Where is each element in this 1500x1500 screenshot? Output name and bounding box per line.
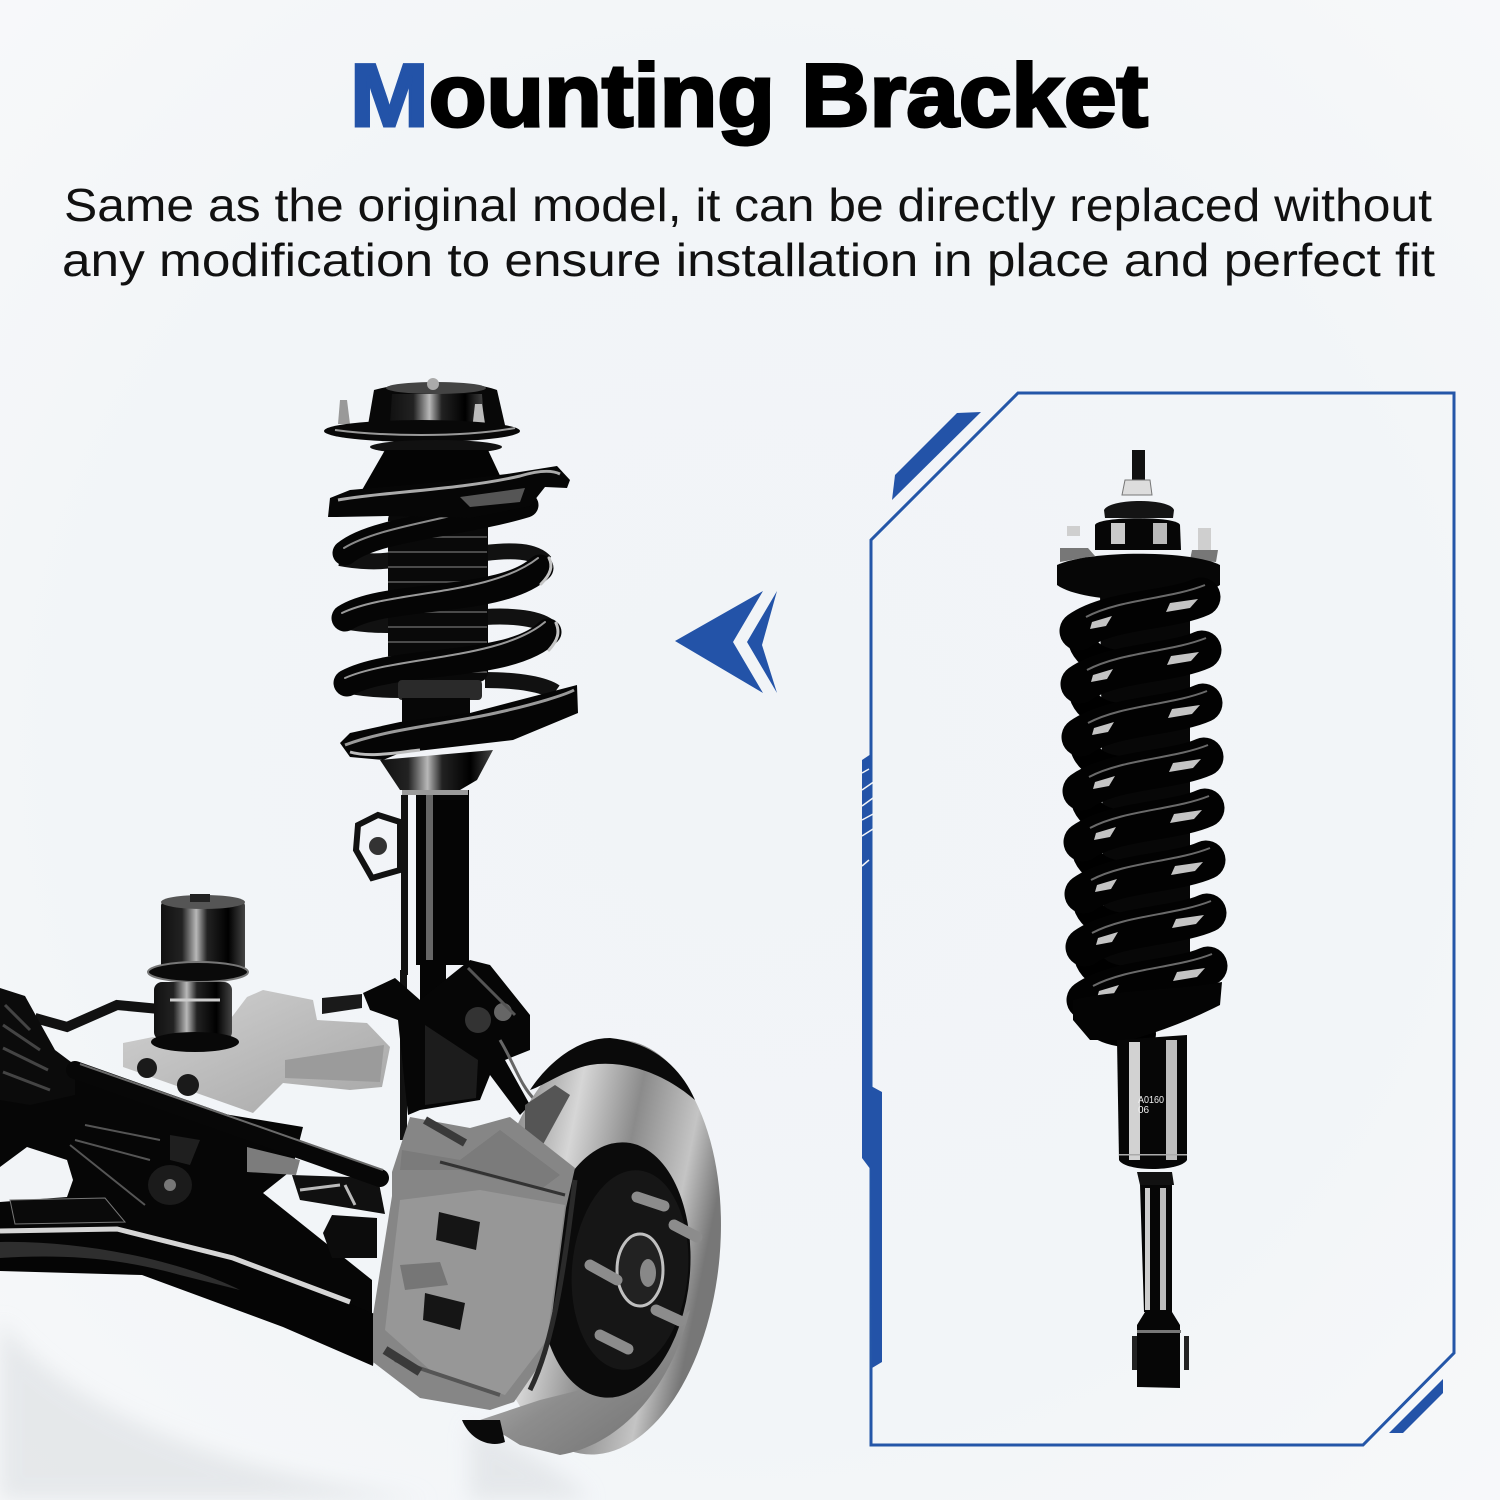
gray steering casting [123,990,390,1113]
steering boot [0,988,75,1105]
steering pipe [35,1005,170,1027]
pump cylinder icon [148,894,248,1052]
lower eye bushing [1132,1312,1189,1388]
arm top highlight band [10,1198,125,1224]
title: Mounting Bracket [350,45,1148,145]
central bellows core [1100,590,1190,1030]
lower control arm [0,1226,377,1366]
top dome [1095,501,1181,550]
tie rod [75,1064,383,1178]
strut sensor bracket [356,815,400,878]
damper rod [1137,1172,1174,1312]
lower coil end seat [1073,982,1222,1040]
arrow pointing to installed strut [675,591,777,693]
bump stop and rod [398,680,482,738]
strut upper: mount, spring, seats [324,378,578,795]
back coil arcs [340,551,555,692]
frame accent top left [892,412,981,500]
part number [1138,1095,1164,1116]
casting bolts [137,1058,199,1096]
mount flange [324,420,520,454]
threaded stud [1122,450,1152,495]
frame accent bottom right [1389,1379,1443,1433]
frame accent left bar [862,754,882,1368]
brake caliper [373,1117,575,1410]
rubber bellows [388,510,488,682]
lower spring seat [340,685,578,760]
steering rack and mass of subframe [0,1060,385,1315]
hub center and studs [590,1197,697,1349]
black cone under mount [358,450,503,500]
mount studs [1060,526,1218,562]
part number: A0160 [1138,1095,1164,1106]
subtitle text: Same as the original model, it can be directly replaced without [64,179,1432,231]
illustration: suspension assembly installed [0,378,738,1464]
brake disc [462,1030,738,1464]
casting inset [285,1045,384,1082]
panel frame: standalone product [862,393,1454,1445]
damper body [1117,1035,1187,1169]
subtitle text: any modification to ensure installation in place and perfect fit [62,234,1435,286]
strut lower tube [400,790,469,1140]
top mount dome [338,378,505,436]
product: standalone coilover strut [1057,450,1222,1388]
subtitle text [62,179,1435,286]
floor reflection under assembly [0,1320,590,1500]
end cap [322,994,362,1014]
upper mount plate [1057,554,1220,600]
hub hat [529,1136,701,1404]
lower cup [380,750,493,790]
part number: 06 [1138,1105,1150,1116]
front coil turns [342,498,558,683]
upper spring seat [328,466,570,518]
strut knuckle bracket [363,960,535,1115]
coil turns [1079,585,1212,1034]
